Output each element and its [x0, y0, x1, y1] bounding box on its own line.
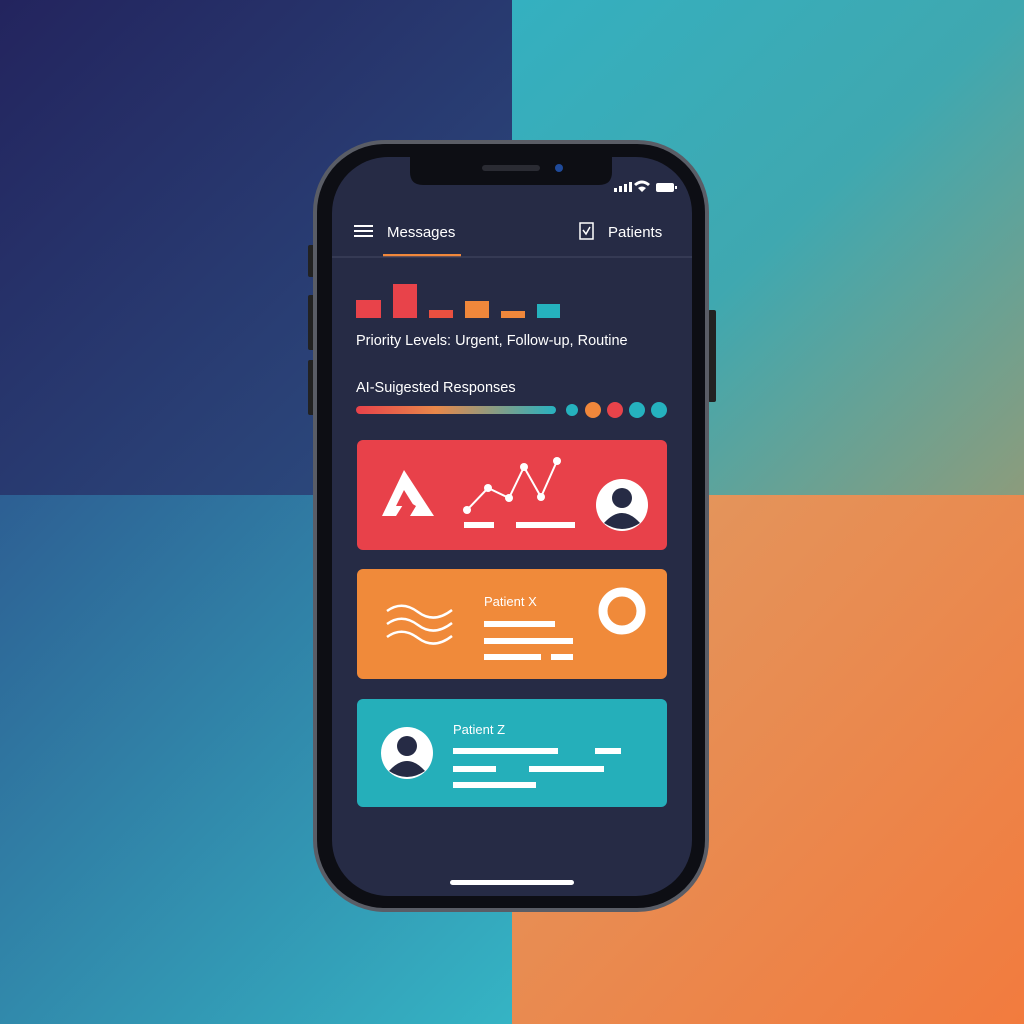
avatar — [596, 479, 648, 531]
card: patient X — [357, 569, 667, 679]
card: urgent — [357, 440, 667, 550]
priority bar chart: Priority Levels: Urgent, Follow-up, Routine — [356, 333, 628, 349]
icon: alert triangle — [382, 470, 434, 516]
priority bar chart — [356, 284, 628, 349]
nav bar: Messages — [387, 224, 455, 241]
AI suggested responses: AI-Suigested Responses — [356, 380, 516, 396]
status icons — [614, 180, 677, 192]
line chart — [463, 457, 575, 528]
card: patient Z — [357, 699, 667, 807]
home indicator — [450, 880, 574, 885]
card: patient Z: Patient Z — [453, 722, 505, 737]
card: patient X: Patient X — [484, 594, 537, 609]
nav bar — [332, 223, 692, 257]
AI suggested responses — [356, 380, 667, 418]
nav bar: Patients — [608, 224, 662, 241]
notch — [410, 157, 612, 185]
phone — [308, 140, 716, 912]
